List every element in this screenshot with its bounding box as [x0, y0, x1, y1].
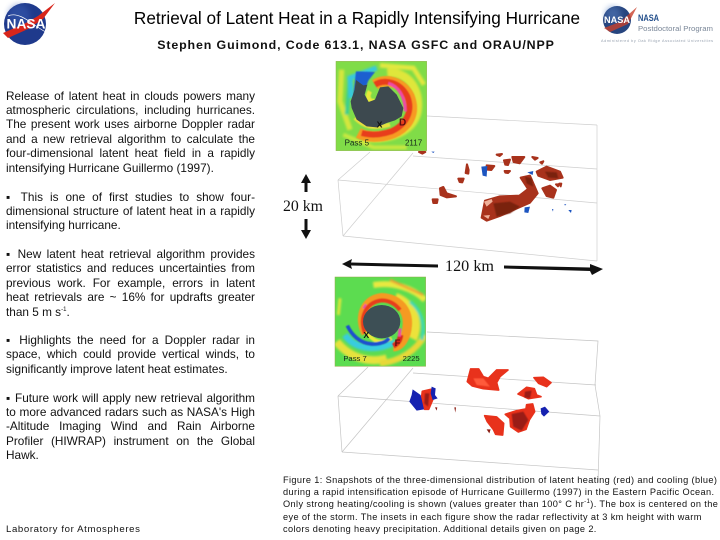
arrow: 120 km left — [342, 259, 438, 269]
text block: bullet 4: -Altitude Imaging Wind and Rain Airborne — [6, 419, 255, 433]
heating and cooling blobs: pass 7 — [409, 369, 551, 435]
logo: NASA meatball: NASA — [6, 16, 46, 32]
inset labels: pass 7: X — [363, 330, 369, 340]
figure caption — [283, 475, 718, 534]
inset labels: pass 7: 2225 — [403, 354, 420, 363]
inset labels: pass 5 — [345, 118, 423, 147]
inset labels: pass 5: X — [377, 120, 383, 130]
text block: bullet 3: ▪ Highlights the need for a Doppler radar in — [6, 333, 255, 347]
text block: bullet 2: ▪ New latent heat retrieval algorithm provides — [6, 247, 255, 261]
inset labels: pass 7: F — [395, 338, 401, 348]
3D box: pass 7 wireframe — [338, 332, 600, 482]
text block: bullet 3 — [6, 333, 255, 376]
text block: introduction: The present work uses airborne Doppler radar — [6, 117, 255, 131]
figure caption: colors denoting heavy precipitation. Additional details given on page 2. — [283, 524, 597, 534]
figure caption: during a rapid intensification episode of Hurricane Guillermo (1997) in the Eastern Pacific Ocean. — [283, 487, 714, 497]
radar reflectivity inset: pass 7 — [335, 277, 426, 366]
text block: bullet 4: ▪ Future work will apply new retrieval algorithm — [6, 391, 255, 405]
text block: bullet 4 — [6, 391, 255, 462]
text block: bullet 2 — [6, 247, 255, 319]
text block: introduction: four-dimensional latent heat field in a rapidly — [6, 146, 255, 160]
inset labels: pass 7 — [343, 330, 420, 363]
inset labels: pass 5: Pass 5 — [345, 138, 370, 147]
text block: bullet 3: significantly improve latent heat estimates. — [6, 362, 228, 376]
subtitle: author: Stephen Guimond, Code 613.1, NASA GSFC and ORAU/NPP — [157, 38, 555, 52]
text block: introduction: Release of latent heat in clouds powers many — [6, 89, 255, 103]
logo: NASA Postdoctoral Program: Administered by Oak Ridge Associated Universities — [601, 39, 713, 43]
text block: bullet 3: space, which could provide vertical winds, to — [6, 347, 255, 361]
text block: bullet 2: error statistics and reduces uncertainties from — [6, 261, 255, 275]
text block: bullet 4: Hawk. — [6, 448, 39, 462]
figure caption: eye of the storm. The insets in each figure show the radar reflectivity at 3 km height with warm — [283, 512, 702, 522]
figure caption: Only strong heating/cooling is shown (values greater than 100° C hr-1). The box is centered on the — [283, 499, 718, 509]
inset labels: pass 7: Pass 7 — [343, 354, 367, 363]
text block: introduction: and a new retrieval algorithm to calculate the — [6, 132, 255, 146]
arrow: 20 km up — [301, 174, 311, 192]
text block: introduction — [6, 89, 255, 175]
text block: bullet 1 — [6, 190, 255, 232]
figure caption: Figure 1: Snapshots of the three-dimensional distribution of latent heating (red) and cooling (blue) — [283, 475, 717, 485]
logo: NASA Postdoctoral Program: Postdoctoral Program — [638, 24, 713, 33]
logo: NASA Postdoctoral Program: NASA — [604, 15, 630, 25]
radar reflectivity inset: pass 5 — [336, 61, 427, 151]
inset labels: pass 5: 2117 — [405, 138, 423, 147]
title: Retrieval of Latent Heat in a Rapidly Intensifying Hurricane — [134, 8, 580, 28]
text block: bullet 2: previous work. For example, errors in latent — [6, 276, 255, 290]
label: 120 km: 120 km — [445, 258, 495, 275]
text block: bullet 4: to more advanced radars such as NASA's High — [6, 405, 255, 419]
text block: bullet 4: Profiler (HIWRAP) instrument on the Global — [6, 434, 255, 448]
text block: introduction: atmospheric circulations, including hurricanes. — [6, 103, 255, 117]
heating and cooling blobs: pass 5 — [419, 152, 572, 221]
text block: bullet 1: ▪ This is one of first studies to show four- — [6, 190, 255, 204]
text: Laboratory for Atmospheres: Laboratory for Atmospheres — [6, 524, 141, 535]
3D box: pass 5 wireframe — [338, 116, 597, 261]
text block: bullet 2: than 5 m s-1. — [6, 305, 70, 319]
small heating specks — [435, 407, 491, 433]
inset labels: pass 5: D — [399, 118, 406, 129]
text block: bullet 1: intensifying hurricane. — [6, 218, 121, 232]
logo: NASA meatball — [3, 3, 55, 45]
text block: bullet 2: heat retrievals are ~ 16% for updrafts greater — [6, 290, 255, 304]
text block: introduction: intensifying Hurricane Guillermo (1997). — [6, 161, 214, 175]
logo: NASA Postdoctoral Program — [601, 6, 713, 43]
arrow: 120 km right — [504, 264, 603, 275]
arrow: 20 km down — [301, 219, 311, 239]
logo: NASA Postdoctoral Program: NASA — [638, 13, 659, 24]
text block: bullet 1: dimensional structure of latent heat in a rapidly — [6, 204, 255, 218]
label: 20 km: 20 km — [283, 198, 324, 215]
